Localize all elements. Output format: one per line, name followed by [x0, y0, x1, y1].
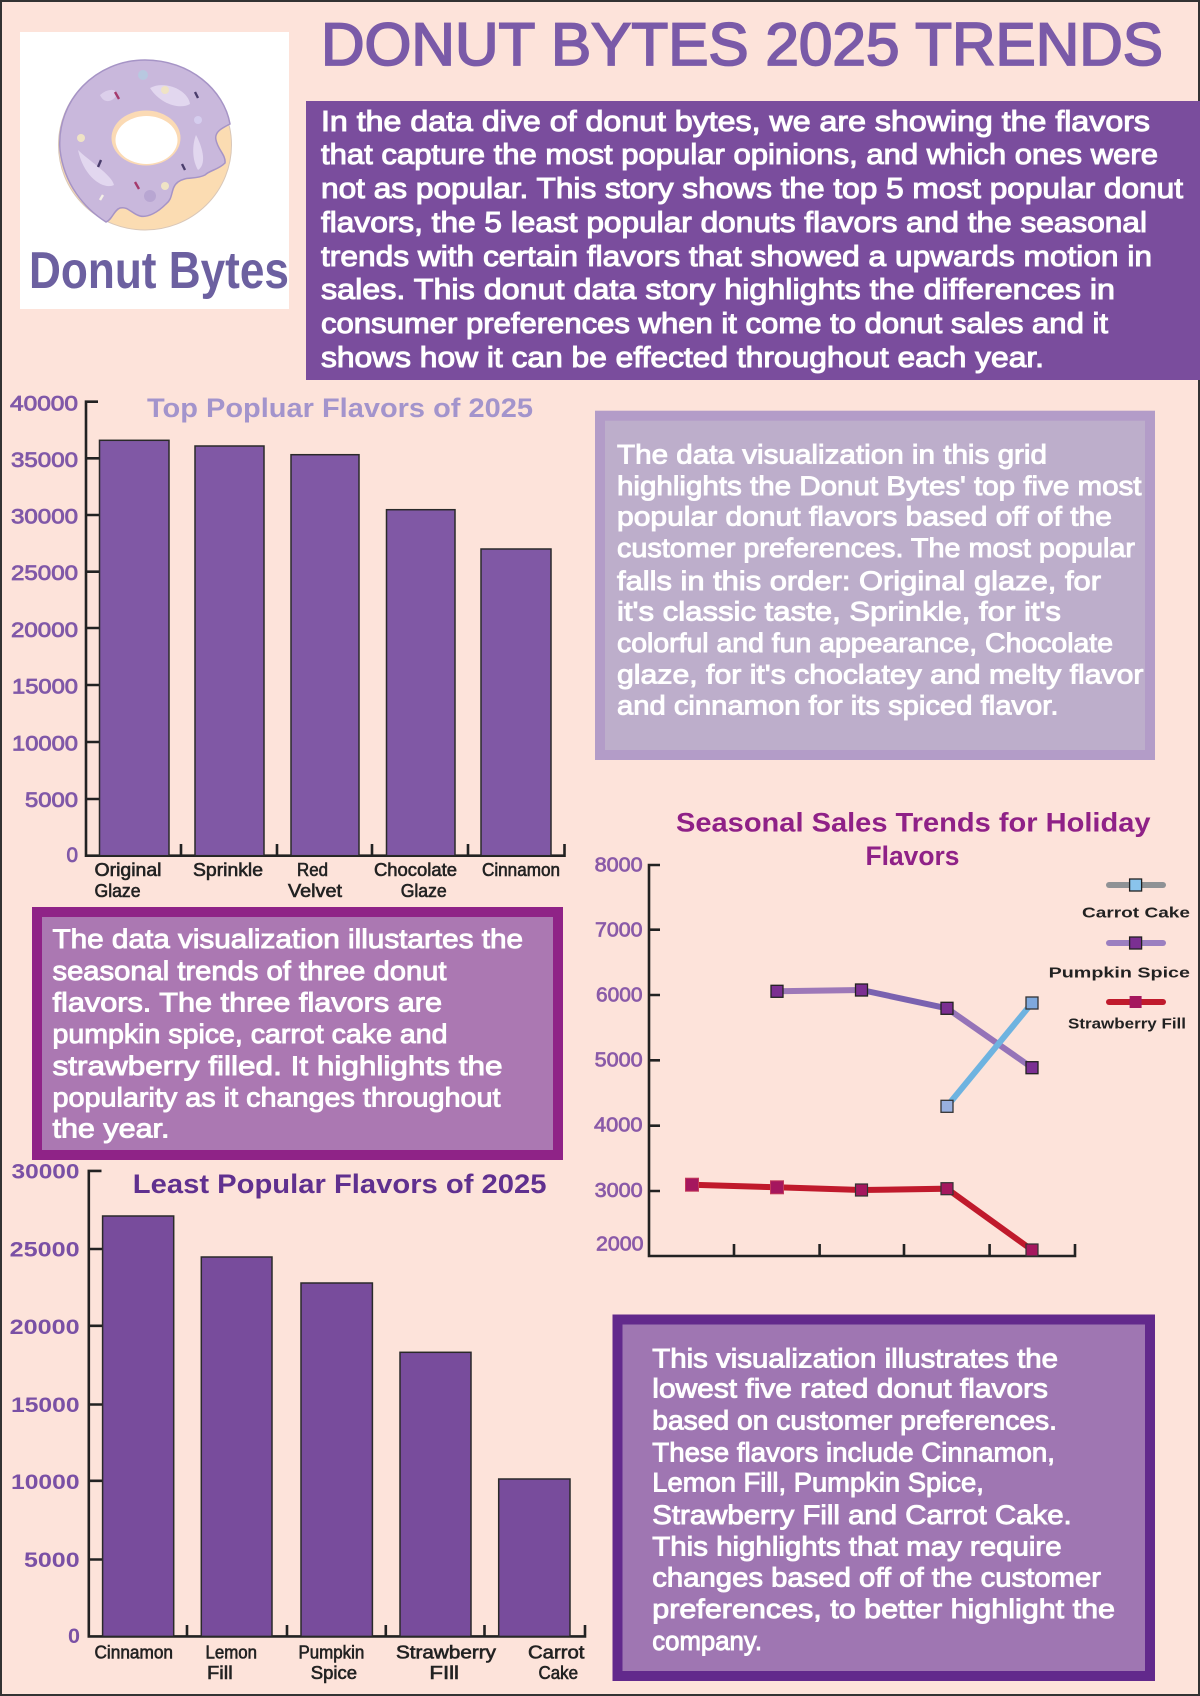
panel: top flavors description: highlights the Donut Bytes' top five most: [617, 471, 1142, 501]
axes: [86, 402, 564, 856]
logo: Donut Bytes: [20, 32, 289, 309]
x axis labels: Pumpkin: [298, 1642, 364, 1662]
panel: seasonal trends description: flavors. The three flavors are: [52, 988, 442, 1018]
panel: top flavors description: popular donut flavors based off of the: [617, 502, 1112, 532]
y axis labels: 30000: [12, 1160, 80, 1184]
panel: introduction text: [306, 101, 1200, 380]
x axis labels: Fill: [207, 1663, 233, 1683]
panel: least popular description: Strawberry Fill and Carrot Cake.: [652, 1500, 1072, 1530]
y axis labels: 2000: [596, 1234, 644, 1256]
x axis labels: Chocolate: [374, 860, 457, 880]
x axis labels: Cake: [538, 1663, 578, 1683]
x axis labels: Cinnamon: [482, 860, 560, 880]
x axis labels: Cinnamon: [94, 1642, 173, 1662]
panel: introduction text: flavors, the 5 least popular donuts flavors and the seasonal: [321, 207, 1147, 239]
legend: [1049, 879, 1190, 1032]
chart title: Top Popluar Flavors of 2025: [147, 393, 533, 423]
x axis labels: FIll: [429, 1663, 459, 1683]
panel: introduction text: sales. This donut data story highlights the differences in: [321, 274, 1115, 306]
panel: least popular description: [618, 1320, 1150, 1676]
pumpkin spice markers: [771, 984, 1038, 1074]
y axis labels: 3000: [595, 1180, 643, 1202]
panel: introduction text: In the data dive of donut bytes, we are showing the flavors: [321, 106, 1150, 138]
panel: seasonal trends description: the year.: [52, 1114, 170, 1144]
logo wordmark: Donut Bytes: [29, 242, 289, 300]
panel: least popular description: preferences, to better highlight the: [652, 1594, 1115, 1624]
y axis labels: 25000: [11, 562, 78, 585]
panel: seasonal trends description: pumpkin spice, carrot cake and: [52, 1019, 448, 1049]
panel: seasonal trends description: [37, 912, 558, 1155]
x axis labels: Glaze: [401, 881, 447, 901]
panel: seasonal trends description: The data visualization illustartes the: [52, 924, 523, 954]
x axis labels: Red: [297, 860, 328, 880]
chart title: Flavors: [866, 841, 960, 871]
bars: [100, 440, 551, 856]
panel: least popular description: This visualization illustrates the: [652, 1343, 1058, 1373]
panel: least popular description: Lemon Fill, Pumpkin Spice,: [652, 1468, 984, 1498]
y axis labels: 0: [68, 1625, 80, 1648]
y axis labels: 20000: [11, 619, 78, 642]
panel: top flavors description: and cinnamon for its spiced flavor.: [617, 690, 1058, 720]
y axis labels: 4000: [594, 1115, 642, 1137]
series: pumpkin spice: [777, 990, 1032, 1068]
y axis labels: 7000: [595, 920, 642, 942]
x axis labels: Sprinkle: [193, 860, 263, 880]
panel: introduction text: trends with certain flavors that showed a upwards motion in: [321, 241, 1152, 273]
panel: least popular description: This highlights that may require: [652, 1532, 1062, 1562]
legend: Carrot Cake: [1082, 905, 1190, 922]
y axis labels: 20000: [10, 1316, 80, 1339]
x axis labels: Original: [94, 860, 162, 880]
line chart: seasonal sales trends: [594, 808, 1190, 1256]
panel: least popular description: changes based off of the customer: [652, 1563, 1101, 1593]
y axis labels: 40000: [10, 392, 78, 416]
y axis labels: 5000: [595, 1050, 643, 1072]
x axis labels: Lemon: [206, 1642, 257, 1662]
panel: top flavors description: The data visualization in this grid: [617, 440, 1047, 470]
chart title: Least Popular Flavors of 2025: [133, 1169, 547, 1199]
x axis labels: Strawberry: [396, 1642, 496, 1662]
bar chart: least popular flavors: [10, 1160, 585, 1683]
x axis labels: Carrot: [528, 1642, 584, 1662]
axes: [649, 865, 1075, 1256]
y axis labels: 5000: [25, 789, 78, 812]
y axis labels: 25000: [10, 1238, 80, 1262]
y axis labels: 35000: [11, 449, 78, 472]
panel: top flavors description: glaze, for it's choclatey and melty flavor: [617, 660, 1144, 690]
panel: introduction text: shows how it can be effected throughout each year.: [321, 342, 1044, 374]
y axis labels: 8000: [595, 855, 643, 877]
legend: Strawberry Fill: [1068, 1015, 1186, 1032]
axes: [89, 1171, 585, 1636]
panel: introduction text: consumer preferences when it come to donut sales and it: [321, 308, 1108, 340]
panel: top flavors description: colorful and fun appearance, Chocolate: [617, 628, 1113, 658]
panel: top flavors description: falls in this order: Original glaze, for: [617, 566, 1101, 596]
panel: seasonal trends description: seasonal trends of three donut: [52, 956, 447, 986]
panel: least popular description: These flavors include Cinnamon,: [652, 1438, 1055, 1468]
legend: Pumpkin Spice: [1049, 965, 1190, 982]
panel: introduction text: not as popular. This story shows the top 5 most popular donut: [321, 173, 1183, 205]
series: strawberry fill: [686, 1178, 1038, 1256]
bars: [103, 1216, 570, 1636]
panel: introduction text: that capture the most popular opinions, and which ones were: [321, 139, 1158, 171]
x axis labels: Spice: [311, 1663, 357, 1683]
panel: least popular description: company.: [652, 1626, 762, 1656]
panel: seasonal trends description: popularity as it changes throughout: [52, 1083, 501, 1113]
chart title: Seasonal Sales Trends for Holiday: [676, 808, 1150, 838]
chart title: [676, 808, 1150, 871]
y axis labels: 15000: [11, 1394, 80, 1417]
x axis labels: Velvet: [288, 881, 342, 901]
y axis labels: [10, 392, 78, 867]
panel: least popular description: based on customer preferences.: [652, 1405, 1057, 1435]
y axis labels: 0: [66, 844, 78, 867]
panel: top flavors description: [600, 416, 1150, 755]
panel: least popular description: lowest five rated donut flavors: [652, 1374, 1048, 1404]
title: DONUT BYTES 2025 TRENDS: [321, 11, 1163, 78]
panel: seasonal trends description: strawberry filled. It highlights the: [52, 1051, 502, 1081]
y axis labels: [594, 855, 644, 1256]
y axis labels: 15000: [12, 676, 78, 698]
y axis labels: 10000: [11, 1471, 80, 1494]
y axis labels: [10, 1160, 80, 1648]
y axis labels: 6000: [596, 985, 642, 1007]
icon: donut: [58, 60, 232, 230]
bar chart: top popular flavors: [10, 392, 564, 901]
x axis labels: [94, 1642, 584, 1683]
x axis labels: [94, 860, 560, 901]
panel: top flavors description: customer preferences. The most popular: [617, 533, 1135, 563]
y axis labels: 10000: [12, 732, 78, 756]
panel: top flavors description: it's classic taste, Sprinkle, for it's: [617, 596, 1061, 626]
series: carrot cake: [941, 997, 1038, 1112]
y axis labels: 30000: [11, 506, 78, 528]
x axis labels: Glaze: [94, 881, 140, 901]
y axis labels: 5000: [24, 1549, 80, 1572]
